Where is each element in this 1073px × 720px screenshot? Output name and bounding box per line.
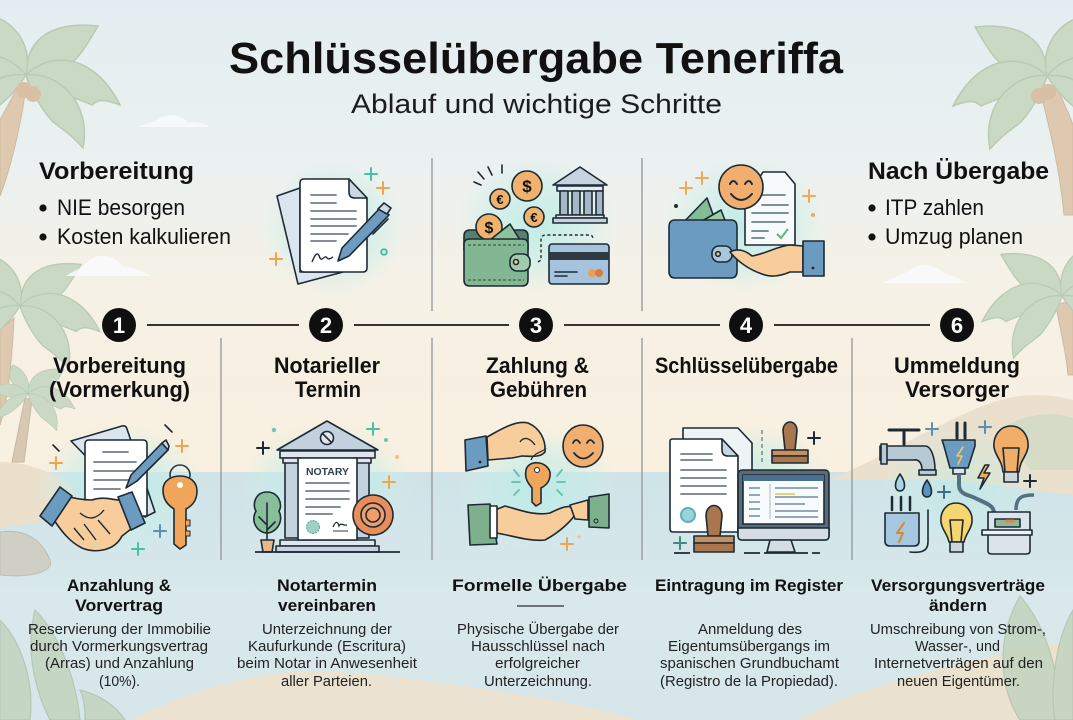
- timeline: [102, 308, 974, 342]
- text: Anzahlung: (10%).: [99, 674, 140, 690]
- key: [170, 465, 190, 485]
- background: clouds: [66, 115, 965, 283]
- lower hands: [495, 506, 578, 540]
- text: Versorgungsverträge: Versorgungsverträge: [871, 576, 1045, 595]
- bullet list: ITP zahlen: [885, 195, 984, 220]
- icon: document and pen: [261, 160, 405, 296]
- text: Formelle Übergabe: Physische Übergabe der: [457, 620, 619, 638]
- background: right sand: [798, 640, 1073, 720]
- top stamp: [772, 422, 808, 463]
- notary document: [298, 458, 357, 540]
- front stamp: [694, 506, 734, 552]
- text: Eintragung im Register: Anmeldung des: [698, 622, 802, 638]
- text: Eintragung im Register: Eigentumsübergangs im: [668, 639, 830, 655]
- heading: step 4: Schlüsselübergabe: [655, 353, 838, 378]
- heading: step 3: Zahlung &: [486, 353, 589, 378]
- heading: Nach Übergabe: Nach Übergabe: [868, 158, 1049, 185]
- icon: money wallet, bank and card: $: [485, 220, 494, 237]
- text: Versorgungsverträge: ändern: [929, 596, 987, 615]
- heading: step 6: Ummeldung: [894, 353, 1020, 378]
- text: Formelle Übergabe: Unterzeichnung.: [484, 674, 592, 690]
- heading: step 3: [486, 353, 589, 402]
- back document: [683, 428, 752, 520]
- text: Formelle Übergabe: Hausschlüssel nach: [471, 639, 605, 655]
- background: left plants: [0, 610, 125, 720]
- step 1: [102, 308, 136, 342]
- text: Eintragung im Register: [655, 576, 843, 690]
- background: rock left: [0, 531, 51, 576]
- text: Eintragung im Register: (Registro de la Propiedad).: [660, 674, 838, 690]
- smiley: [719, 165, 763, 209]
- bills: [678, 198, 718, 228]
- text: Notartermin: Kaufurkunde (Escritura): [248, 639, 406, 655]
- adapter: [885, 497, 928, 552]
- seal: [353, 495, 393, 535]
- icon: register, stamps and monitor: [663, 422, 833, 556]
- subtitle: Ablauf und wichtige Schritte: [351, 89, 722, 119]
- text: Formelle Übergabe: Formelle Übergabe: [452, 576, 627, 595]
- text: Versorgungsverträge: neuen Eigentümer.: [897, 674, 1020, 690]
- text: Notartermin: Unterzeichnung der: [262, 622, 392, 638]
- background: right plants: [1003, 596, 1073, 720]
- top hand: [487, 422, 545, 460]
- step 1: 1: [113, 313, 125, 338]
- heading: step 6: Versorger: [905, 377, 1009, 402]
- icon: money wallet, bank and card: $: [522, 177, 532, 196]
- icon: handshake, contract and key: [35, 424, 205, 556]
- icon: money wallet, bank and card: €: [496, 192, 504, 207]
- hand: [730, 245, 803, 276]
- bullet list: [39, 195, 231, 249]
- text: Notartermin: vereinbaren: [278, 596, 376, 615]
- background: far hill right: [828, 395, 1073, 495]
- credit card: [549, 244, 609, 284]
- heading: step 2: Notarieller: [274, 353, 380, 378]
- wallet: [464, 230, 528, 250]
- text: Formelle Übergabe: [452, 576, 627, 690]
- text: Versorgungsverträge: Internetverträgen auf den: [874, 656, 1043, 672]
- coins: [490, 171, 544, 227]
- sparkles: [680, 182, 692, 194]
- step 3: 3: [530, 313, 542, 338]
- background: palm top right: [953, 18, 1073, 215]
- sparkles: [367, 423, 379, 435]
- background: sand island left: [0, 462, 77, 527]
- text: Notartermin: Notartermin: [277, 576, 377, 595]
- handshake: [54, 495, 140, 551]
- building: [276, 421, 379, 552]
- column headings: [49, 353, 1020, 402]
- heading: step 2: [274, 353, 380, 402]
- step 3: [519, 308, 553, 342]
- text: Anzahlung: durch Vormerkungsvertrag: [30, 639, 208, 655]
- background: palm middle right: [982, 247, 1073, 375]
- monitor: [738, 470, 829, 552]
- text: Anzahlung: Vorvertrag: [75, 596, 163, 615]
- cable: [959, 474, 994, 513]
- heading: step 1: (Vormerkung): [49, 377, 190, 402]
- panel: Vorbereitung checklist: [39, 158, 231, 249]
- background: green hill right: [1000, 414, 1073, 470]
- rays: [512, 470, 565, 495]
- heading: step 1: [49, 353, 190, 402]
- orange bulb: [994, 426, 1028, 482]
- sparkles: [50, 457, 62, 469]
- background: palm small left: [0, 365, 75, 462]
- text: Eintragung im Register: spanischen Grundbuchamt: [660, 656, 839, 672]
- step 2: [309, 308, 343, 342]
- icon: key handover hands: [455, 422, 619, 552]
- bullet list: Kosten kalkulieren: [57, 224, 231, 249]
- background: bottom sand: [130, 671, 640, 720]
- background: palm middle left: [0, 257, 100, 425]
- key: [526, 463, 550, 506]
- heading: step 6: [894, 353, 1020, 402]
- tree: [254, 492, 281, 552]
- background: sky: [0, 0, 1073, 473]
- bullet list: Umzug planen: [885, 224, 1023, 249]
- step 6: [940, 308, 974, 342]
- title: Schlüsselübergabe Teneriffa: [229, 34, 844, 83]
- icon: utilities: [875, 421, 1045, 556]
- heading: Vorbereitung: Vorbereitung: [39, 158, 194, 185]
- step 2: 2: [320, 313, 332, 338]
- text: Eintragung im Register: Eintragung im Register: [655, 576, 843, 595]
- bank: [553, 167, 607, 223]
- icon: money wallet, bank and card: [456, 157, 616, 293]
- heading: step 2: Termin: [295, 377, 361, 402]
- front document: [670, 439, 738, 532]
- gas meter: [982, 512, 1032, 554]
- wallet: [669, 220, 737, 278]
- text: Notartermin: aller Parteien.: [281, 674, 372, 690]
- text: Notartermin: [237, 576, 417, 690]
- background: palm top left: [0, 17, 120, 196]
- text: Notartermin: beim Notar in Anwesenheit: [237, 656, 417, 672]
- text: Anzahlung: (Arras) und Anzahlung: [45, 656, 194, 672]
- dividers: [221, 158, 852, 560]
- heading: step 3: Gebühren: [490, 377, 587, 402]
- yellow bulb: [941, 503, 972, 552]
- icon: money wallet, bank and card: €: [530, 210, 538, 225]
- text: Anzahlung: Reservierung der Immobilie: [28, 622, 211, 638]
- icon: wallet, smiley and hand: [663, 157, 827, 293]
- text: Anzahlung: [28, 576, 211, 690]
- bullet list: NIE besorgen: [57, 195, 185, 220]
- water drops: [895, 474, 905, 491]
- text: Formelle Übergabe: erfolgreicher: [495, 656, 580, 672]
- column texts: [28, 576, 1046, 690]
- faucet: [880, 430, 936, 475]
- text: Anzahlung: Anzahlung &: [67, 576, 171, 595]
- text: Versorgungsverträge: Wasser-, und: [915, 639, 1000, 655]
- document: [745, 172, 795, 245]
- panel: Nach Übergabe checklist: [868, 158, 1049, 249]
- smiley: [563, 425, 603, 467]
- heading: step 1: Vorbereitung: [53, 353, 186, 378]
- step 6: 6: [951, 313, 963, 338]
- text: Versorgungsverträge: Umschreibung von Strom-,: [870, 622, 1046, 638]
- background: sea: [0, 472, 1073, 720]
- plug: [942, 423, 975, 474]
- notary document: NOTARY: [306, 466, 349, 478]
- text: Versorgungsverträge: [870, 576, 1046, 690]
- bullet list: [868, 195, 1023, 249]
- icon: notary building: [239, 421, 415, 558]
- step 4: [729, 308, 763, 342]
- step 4: 4: [740, 313, 753, 338]
